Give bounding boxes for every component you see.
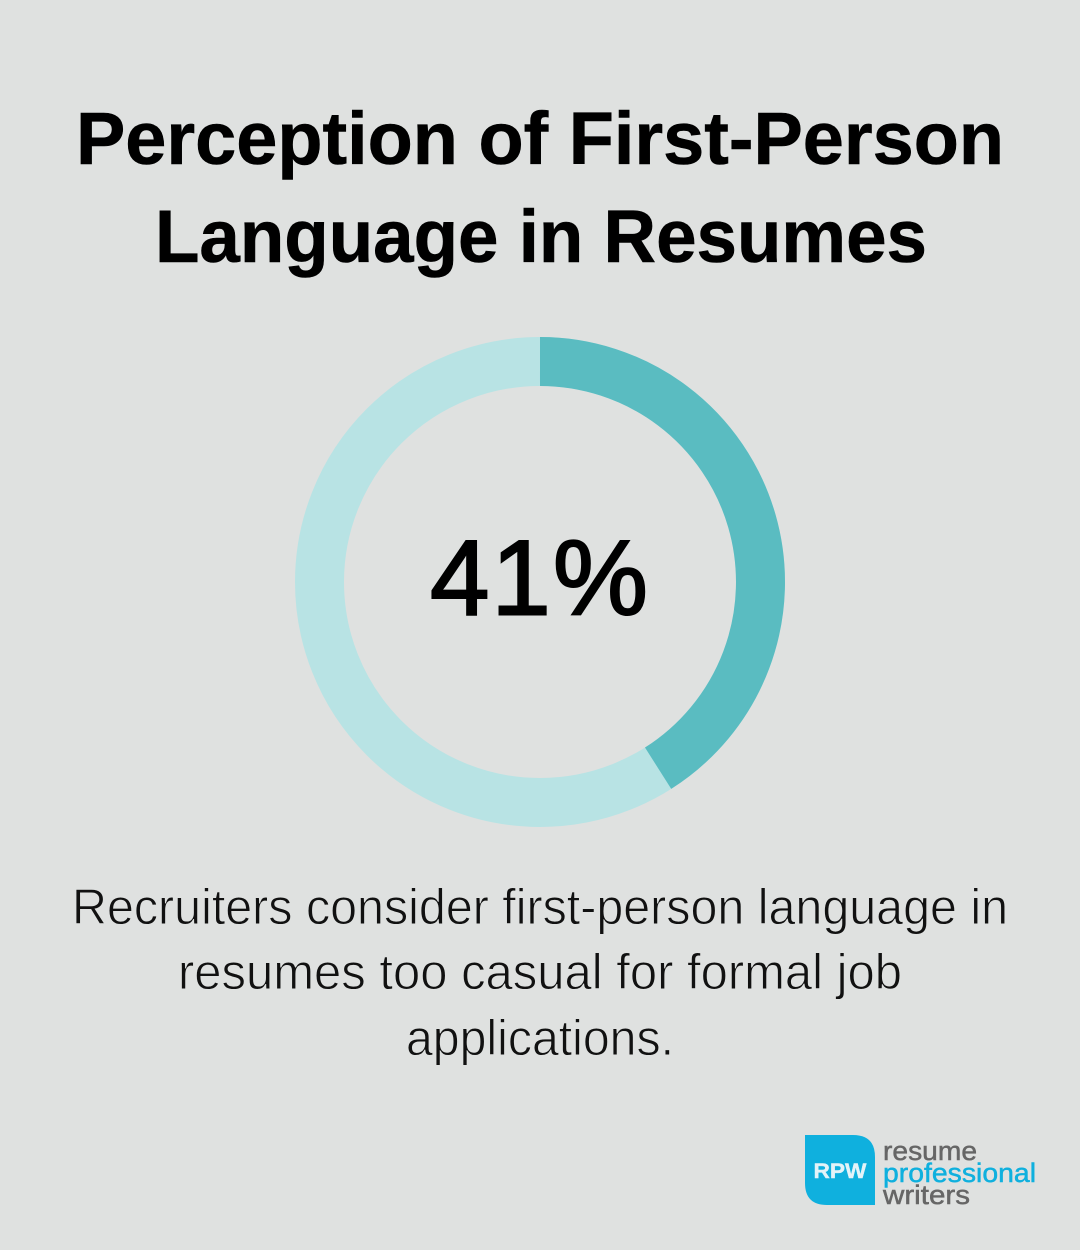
logo badge: [805, 1135, 875, 1205]
title: Perception of First-Person: [76, 97, 1004, 180]
logo wordmark: professional: [883, 1158, 1036, 1188]
description: Recruiters consider first-person language in: [72, 879, 1008, 935]
logo wordmark: [882, 1136, 1036, 1210]
donut value: 41%: [430, 518, 648, 638]
description: applications.: [406, 1010, 674, 1066]
title: [76, 97, 1004, 278]
description: [72, 879, 1008, 1066]
donut chart: 41%: [320, 362, 760, 802]
logo initials: RPW: [814, 1160, 867, 1183]
logo wordmark: writers: [882, 1180, 970, 1210]
title: Language in Resumes: [155, 195, 927, 278]
description: resumes too casual for formal job: [178, 944, 902, 1000]
logo wordmark: resume: [883, 1136, 977, 1166]
logo: RPW resume professional writers: [805, 1135, 1036, 1210]
